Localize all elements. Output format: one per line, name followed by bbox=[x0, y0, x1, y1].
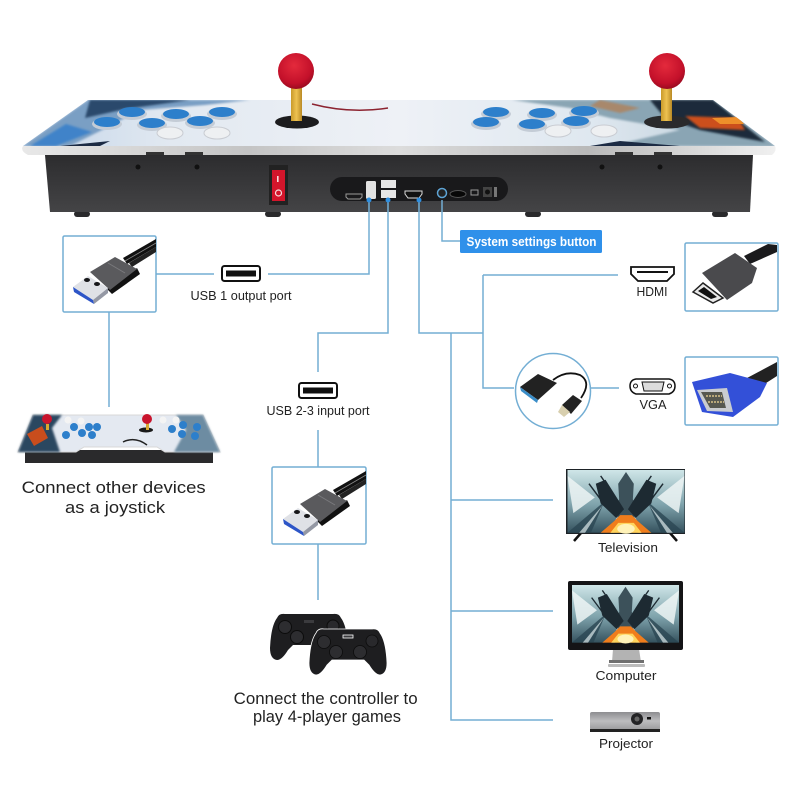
console top artwork bbox=[20, 98, 780, 148]
icon and label: USB 1 output port: USB 1 output port bbox=[190, 289, 292, 303]
panel: USB 2-3 cable bbox=[272, 467, 366, 544]
HDMI out small bbox=[346, 194, 362, 199]
icon: computer monitor bbox=[568, 581, 683, 667]
oval port bbox=[450, 190, 466, 198]
screws bbox=[136, 164, 662, 170]
text: connect other devices: Connect other devices bbox=[22, 478, 206, 497]
buttons: right group bbox=[471, 106, 617, 137]
panel: HDMI cable bbox=[685, 243, 778, 311]
console body bbox=[45, 155, 753, 212]
audio jack bbox=[471, 187, 497, 197]
panel: USB 1 cable bbox=[63, 236, 156, 312]
text: connect the controller: Connect the controller to bbox=[234, 689, 418, 708]
joystick left bbox=[275, 53, 319, 128]
icon and label: HDMI: HDMI bbox=[636, 284, 668, 299]
mini console joystick illustration bbox=[18, 414, 220, 463]
joystick right bbox=[644, 53, 690, 128]
panel: VGA cable bbox=[685, 357, 778, 425]
icon: projector bbox=[590, 712, 660, 732]
power switch bbox=[269, 165, 288, 205]
connector lines bbox=[109, 198, 619, 720]
text: connect the controller: play 4-player games bbox=[253, 707, 401, 726]
icon and label: USB 2-3 input port bbox=[266, 383, 370, 418]
adapter circle bbox=[516, 354, 590, 428]
label: projector: Projector bbox=[599, 736, 654, 751]
callout: system settings button bbox=[460, 230, 602, 253]
label: computer: Computer bbox=[596, 668, 657, 683]
USB port double bbox=[381, 180, 396, 198]
console: arcade machine bbox=[20, 53, 780, 217]
icon and label: USB 2-3 input port: USB 2-3 input port bbox=[266, 404, 370, 418]
buttons: left group bbox=[92, 107, 237, 139]
HDMI port bbox=[405, 191, 422, 198]
callout: system settings button: System settings button bbox=[466, 235, 596, 249]
label: television: Television bbox=[598, 540, 658, 555]
USB port vertical bbox=[366, 181, 376, 199]
icon: television bbox=[566, 469, 685, 541]
icon and label: USB 1 output port bbox=[190, 266, 292, 303]
port panel bbox=[330, 177, 508, 201]
icon and label: VGA: VGA bbox=[640, 397, 667, 412]
icon: game controllers bbox=[270, 614, 387, 675]
feet bbox=[74, 211, 728, 217]
icon and label: HDMI bbox=[631, 267, 674, 299]
icon and label: VGA bbox=[630, 379, 675, 412]
settings knob bbox=[438, 188, 446, 198]
acrylic edge bbox=[22, 146, 776, 155]
text: connect other devices: as a joystick bbox=[65, 498, 166, 517]
marquee slots bbox=[146, 152, 672, 155]
